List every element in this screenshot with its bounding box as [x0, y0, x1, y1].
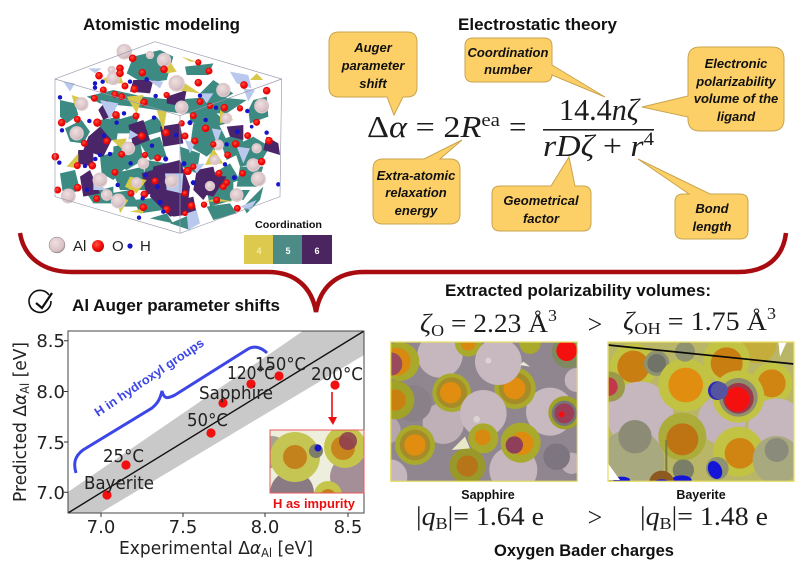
- equation: rDζ + r: [543, 128, 642, 163]
- equation: sapphire polarizability: = 2.23 Å: [444, 309, 548, 338]
- equation: bayerite Bader charge: |q: [640, 502, 659, 531]
- heading: extracted polarizability volumes: Extracted polarizability volumes:: [445, 281, 711, 300]
- callout: coordination number: number: [484, 62, 533, 77]
- legend: coordination: 6: [314, 246, 320, 256]
- heading: oxygen Bader charges: Oxygen Bader charges: [494, 541, 674, 560]
- x axis tick labels: 8.0: [251, 517, 279, 538]
- point labels: 50°C: [187, 410, 228, 431]
- callout: geometrical factor: [492, 157, 591, 231]
- heading: atomistic modeling: Atomistic modeling: [83, 15, 240, 34]
- equation: sapphire polarizability: ζ: [420, 309, 433, 338]
- callout: electronic polarizability volume: ligand: [717, 109, 756, 124]
- equation: bayerite polarizability: OH: [634, 319, 661, 338]
- callout: geometrical factor: Geometrical: [503, 193, 579, 208]
- point labels: Sapphire: [199, 383, 273, 404]
- equation: bayerite polarizability: ζ: [623, 307, 636, 336]
- panel: bayerite render: [607, 341, 795, 482]
- callout: extra-atomic relaxation energy: energy: [395, 203, 438, 218]
- inset caption: H as impurity: [273, 497, 355, 511]
- point labels: Bayerite: [84, 473, 154, 494]
- greater-than sign: >: [588, 310, 602, 339]
- legend: atom types: O: [112, 238, 124, 255]
- x axis title: Al: [261, 546, 272, 560]
- equation: bayerite polarizability: 3: [767, 304, 776, 323]
- point labels: 150°C: [255, 354, 306, 375]
- scatter chart: [10, 331, 364, 560]
- x axis tick labels: 7.5: [169, 517, 197, 538]
- callout: coordination number: [465, 38, 605, 97]
- callout: Auger parameter shift: parameter: [341, 58, 405, 73]
- y axis title: Predicted Δα: [10, 393, 31, 502]
- atomistic model cube: [52, 42, 282, 233]
- label: sapphire: Sapphire: [461, 488, 515, 502]
- legend: coordination: Coordination: [255, 220, 322, 231]
- callout: electronic polarizability volume: polarizability: [695, 74, 776, 89]
- point labels: 25°C: [103, 446, 144, 467]
- greater-than sign: >: [588, 503, 602, 532]
- x axis title: Experimental Δα: [119, 538, 262, 559]
- y axis tick labels: [36, 331, 65, 504]
- legend: coordination: [244, 220, 332, 264]
- callout: bond length: Bond: [695, 201, 730, 216]
- equation: sapphire Bader charge: |= 1.64 e: [448, 502, 544, 531]
- point labels: 200°C: [311, 364, 363, 385]
- callout: electronic polarizability volume: Electronic: [705, 56, 768, 71]
- callout: electronic polarizability volume: [642, 47, 784, 131]
- legend: atom types: H: [140, 238, 151, 255]
- callout: extra-atomic relaxation energy: [373, 140, 462, 224]
- equation: sapphire Bader charge: |q: [416, 502, 435, 531]
- arrow: 200C to impurity inset: [328, 392, 337, 425]
- point labels: 120°C: [227, 363, 275, 384]
- y axis tick labels: 7.0: [36, 483, 65, 504]
- callout: extra-atomic relaxation energy: Extra-atomic: [377, 168, 456, 183]
- point labels: [84, 354, 363, 494]
- callout: coordination number: Coordination: [468, 45, 548, 60]
- equation: sapphire polarizability: 3: [548, 306, 557, 325]
- x axis tick labels: 8.5: [334, 517, 362, 538]
- equation: bayerite polarizability: = 1.75 Å: [661, 307, 767, 336]
- y axis title: Al: [18, 383, 32, 394]
- equation: ea: [481, 110, 501, 131]
- legend: atom types: [49, 237, 151, 255]
- equation: 4: [644, 129, 655, 150]
- legend: atom types: Al: [73, 238, 86, 255]
- x axis title: [eV]: [272, 538, 313, 559]
- equation: =: [509, 109, 526, 144]
- icon: check mark: [29, 290, 52, 312]
- callout: electronic polarizability volume: volume of the: [694, 91, 778, 106]
- panel: sapphire render: [390, 341, 578, 482]
- y axis title: [eV]: [10, 342, 31, 383]
- callout: extra-atomic relaxation energy: relaxation: [385, 185, 447, 200]
- inset: H as impurity: [270, 430, 364, 494]
- equation: 14.4nζ: [559, 92, 641, 127]
- callout: geometrical factor: factor: [523, 211, 560, 226]
- callout: bond length: [638, 159, 748, 239]
- callout: Auger parameter shift: [329, 32, 417, 115]
- equation: sapphire Bader charge: B: [436, 514, 448, 533]
- heading: electrostatic theory: Electrostatic theory: [458, 15, 618, 34]
- label: bayerite: Bayerite: [676, 488, 726, 502]
- y axis tick labels: 8.0: [36, 382, 65, 403]
- y axis tick labels: 8.5: [36, 331, 65, 352]
- x axis tick labels: 7.0: [87, 517, 115, 538]
- legend: coordination: 4: [256, 246, 262, 256]
- brace: H in hydroxyl groups: [75, 336, 267, 473]
- heading: Al Auger parameter shifts: Al Auger parameter shifts: [72, 296, 280, 315]
- equation: [367, 92, 655, 163]
- equation: bayerite Bader charge: B: [660, 514, 672, 533]
- callout: Auger parameter shift: shift: [359, 76, 387, 91]
- y axis tick labels: 7.5: [36, 433, 65, 454]
- brace: H in hydroxyl groups: H in hydroxyl groups: [92, 336, 207, 419]
- equation: sapphire polarizability: O: [431, 321, 444, 340]
- callout: bond length: length: [692, 219, 732, 234]
- equation: bayerite Bader charge: |= 1.48 e: [672, 502, 768, 531]
- equation: Δα = 2R: [367, 109, 479, 144]
- x axis tick labels: [87, 517, 362, 538]
- legend: coordination: 5: [285, 246, 291, 256]
- callout: Auger parameter shift: Auger: [353, 40, 393, 55]
- bracket connecting the methods to the results: [20, 233, 786, 312]
